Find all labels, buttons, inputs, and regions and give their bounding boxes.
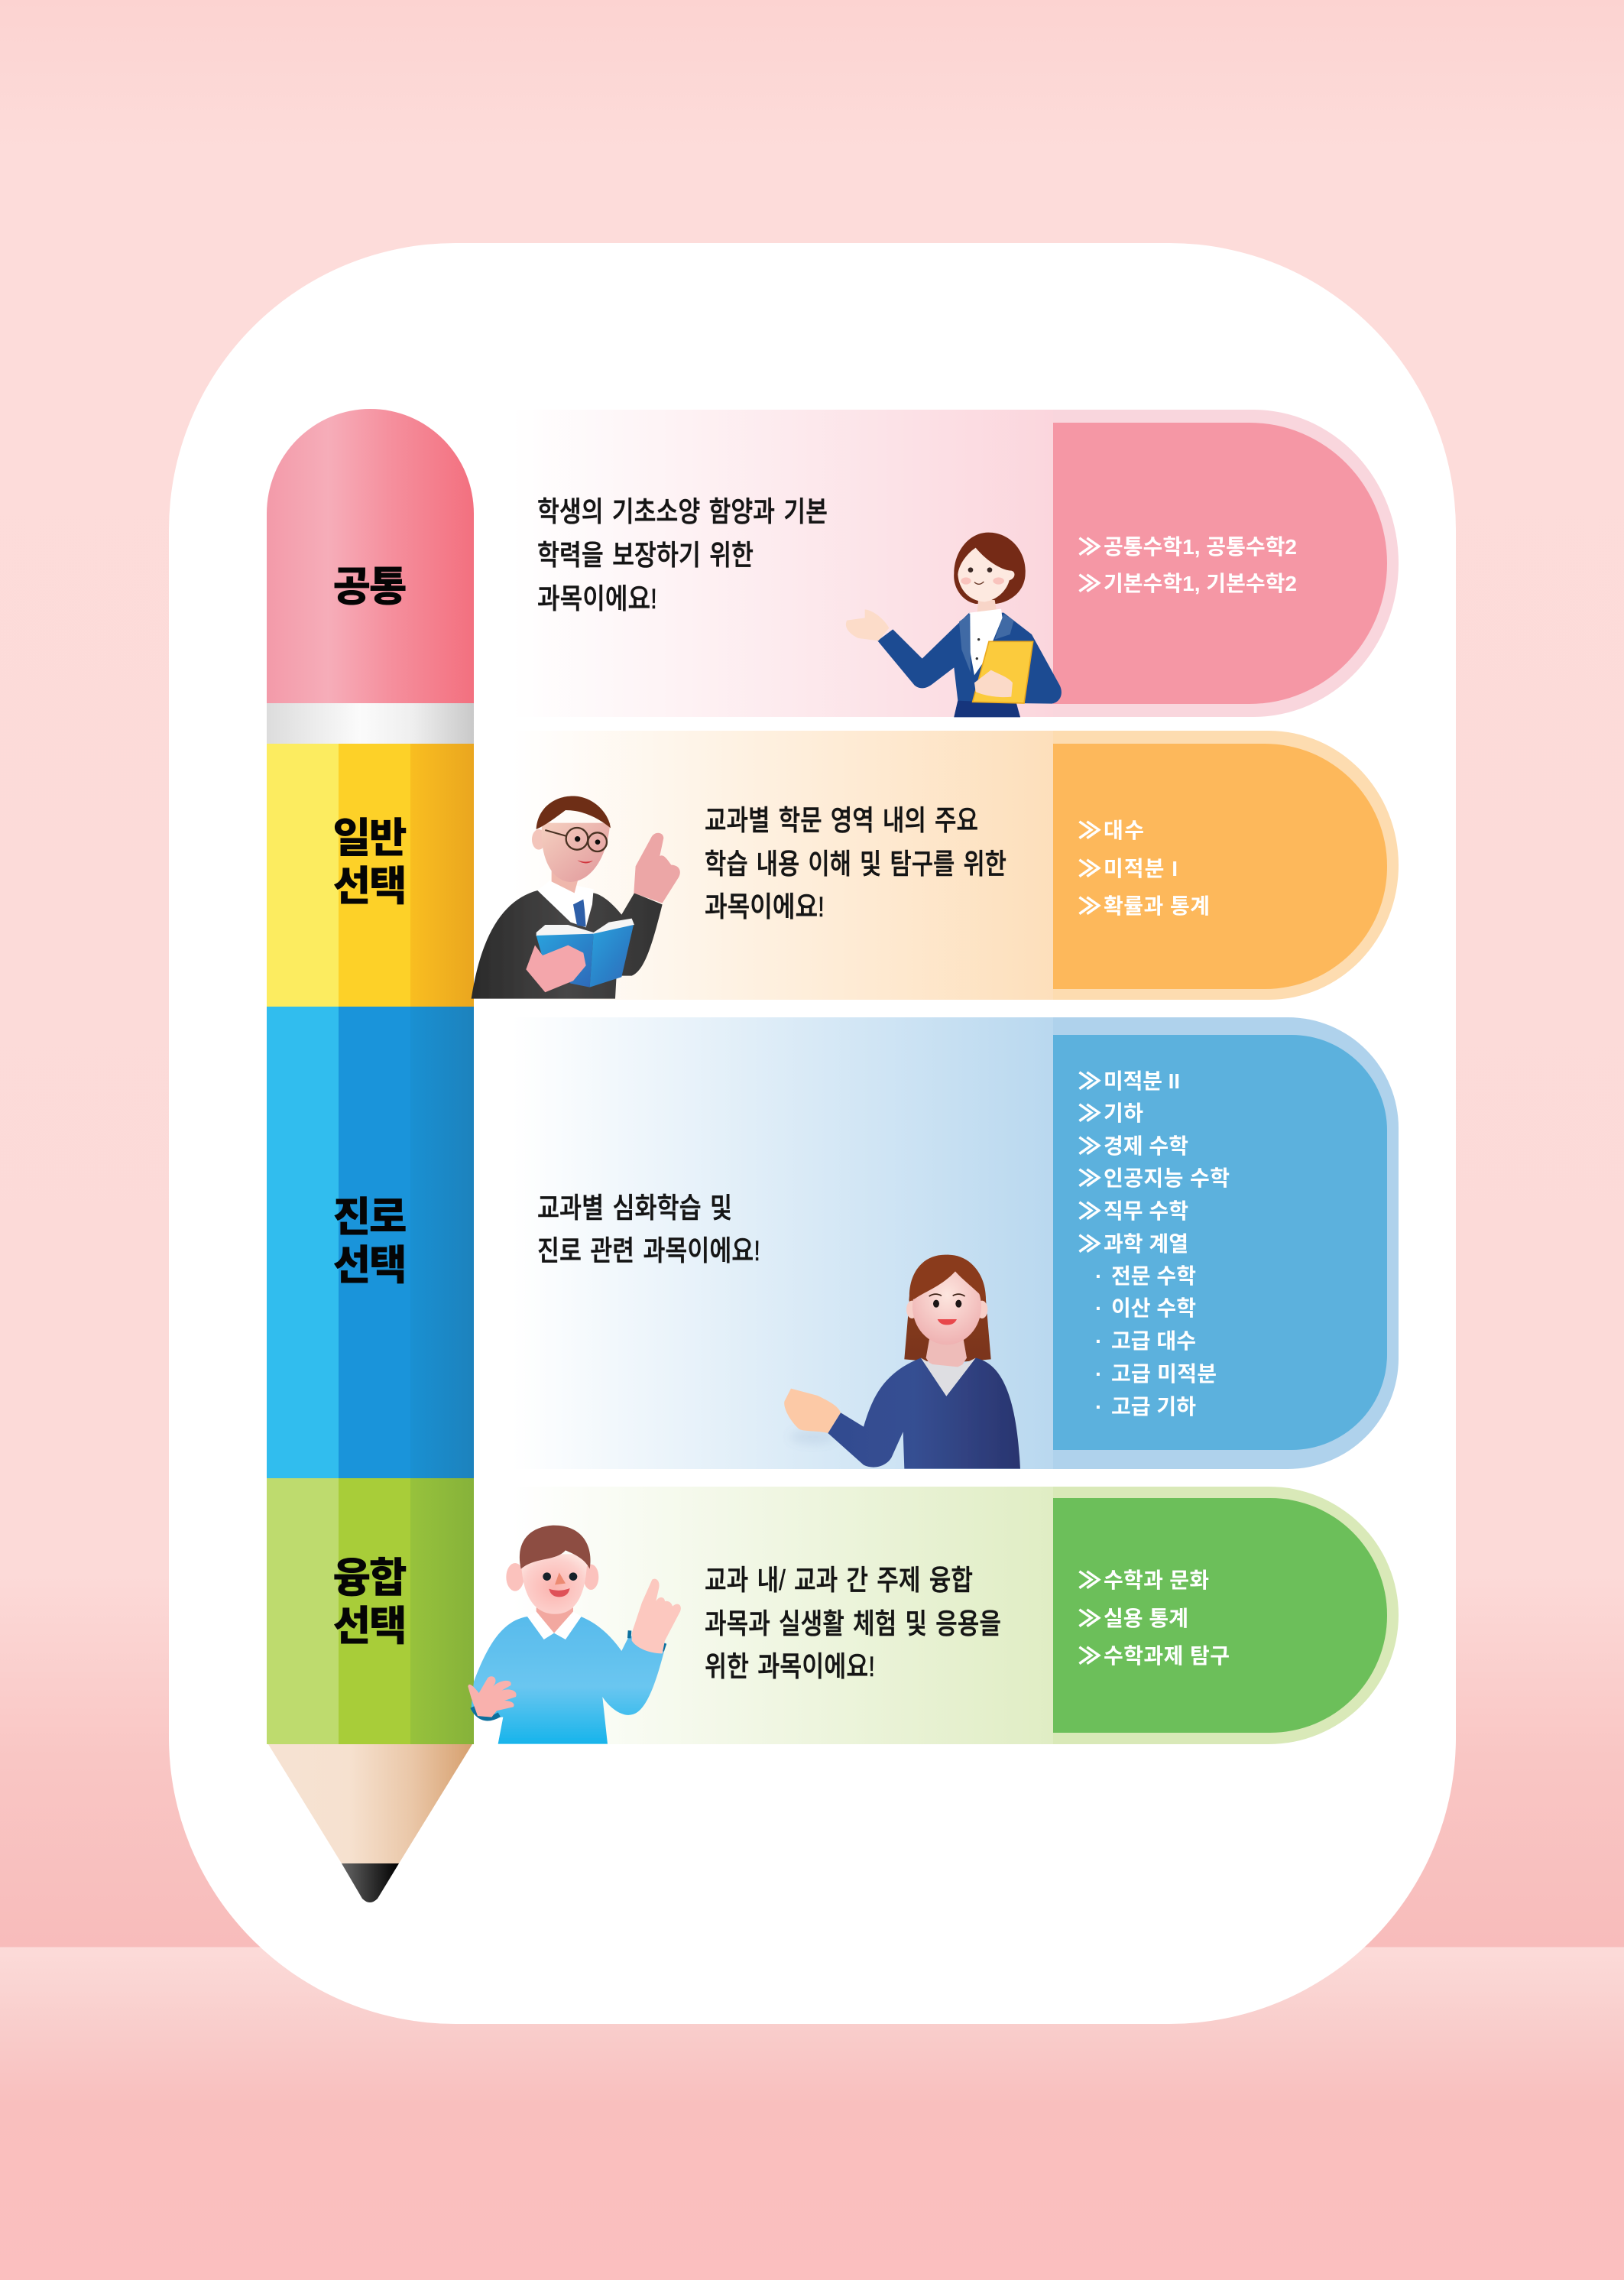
course list: 전문 수학	[1111, 1264, 1196, 1288]
description text	[705, 805, 1006, 923]
pencil label: 진로 선택: 선택	[333, 1243, 407, 1289]
pencil label: 융합 선택	[333, 1555, 407, 1649]
description text: 과목이에요!	[537, 583, 657, 615]
panel background	[497, 731, 1399, 1000]
course list: ≫	[1078, 572, 1101, 597]
course box	[1053, 1035, 1387, 1450]
course list: 고급 대수	[1111, 1329, 1196, 1353]
course list: ≫	[1078, 1607, 1101, 1632]
panel: 공통	[497, 410, 1399, 717]
character: boy in light blue sweater	[468, 1526, 681, 1744]
pencil label: 일반 선택: 선택	[333, 864, 407, 910]
course list: 대수	[1104, 819, 1144, 842]
course list: 고급 기하	[1111, 1395, 1196, 1419]
description text: 위한 과목이에요!	[705, 1651, 875, 1682]
description text: 학습 내용 이해 및 탐구를 위한	[705, 848, 1006, 880]
course list: 직무 수학	[1104, 1199, 1188, 1223]
course list: ·	[1095, 1329, 1102, 1353]
course list: ·	[1095, 1264, 1102, 1288]
course list	[1078, 1568, 1230, 1669]
description text	[537, 496, 828, 615]
course list: 경제 수학	[1104, 1134, 1188, 1158]
pencil label: 융합 선택: 선택	[333, 1604, 407, 1649]
description text	[705, 1565, 1001, 1682]
pencil blue section	[267, 1007, 474, 1478]
pencil	[267, 409, 474, 1902]
description text: 진로 관련 과목이에요!	[537, 1235, 760, 1266]
description text: 교과별 심화학습 및	[537, 1192, 732, 1224]
course list: 인공지능 수학	[1104, 1166, 1230, 1190]
course list: ≫	[1078, 1644, 1101, 1669]
course list	[1078, 1069, 1230, 1419]
panel: 융합 선택	[468, 1487, 1399, 1744]
course list: ≫	[1078, 1069, 1101, 1095]
course list: ·	[1095, 1296, 1102, 1320]
description text: 교과 내/ 교과 간 주제 융합	[705, 1565, 973, 1596]
course list: 이산 수학	[1111, 1296, 1196, 1320]
pencil label: 융합 선택: 융합	[333, 1555, 407, 1601]
course list: ≫	[1078, 894, 1101, 919]
course list: 실용 통계	[1104, 1607, 1188, 1630]
pencil ferrule	[267, 703, 474, 744]
course list: ≫	[1078, 1134, 1101, 1159]
course list: 기하	[1104, 1101, 1143, 1125]
panel background	[497, 410, 1399, 717]
pencil label: 일반 선택	[333, 816, 407, 910]
description text: 교과별 학문 영역 내의 주요	[705, 805, 978, 836]
pencil label: 일반 선택: 일반	[333, 816, 407, 861]
course list: ·	[1095, 1395, 1102, 1419]
course list	[1078, 819, 1210, 919]
course list: ≫	[1078, 857, 1101, 882]
white rounded card	[169, 243, 1456, 2024]
course list: 미적분 II	[1104, 1069, 1180, 1093]
description text: 과목이에요!	[705, 891, 825, 923]
character: man with glasses and blue book	[472, 796, 680, 999]
pencil label: 진로 선택: 진로	[333, 1195, 407, 1241]
course list: ≫	[1078, 1166, 1101, 1192]
pencil green section	[267, 1478, 474, 1744]
description text: 학생의 기초소양 함양과 기본	[537, 496, 828, 527]
character: woman in navy sweater	[784, 1255, 1020, 1469]
course list: ≫	[1078, 1199, 1101, 1224]
pencil yellow section	[267, 744, 474, 1007]
course list: ≫	[1078, 535, 1101, 560]
course list: ≫	[1078, 1101, 1101, 1127]
description text	[537, 1192, 760, 1266]
character: woman with yellow folder	[846, 533, 1062, 717]
course list: 수학과제 탐구	[1104, 1644, 1230, 1668]
pencil label: 공통: 공통	[333, 564, 407, 610]
panel: 일반 선택	[472, 731, 1399, 1000]
panel background	[497, 1017, 1399, 1469]
pencil lead	[342, 1863, 399, 1902]
panel: 진로 선택	[497, 1017, 1399, 1469]
course list: 과학 계열	[1104, 1232, 1188, 1256]
course list: ·	[1095, 1362, 1102, 1386]
course list: ≫	[1078, 819, 1101, 844]
course list: ≫	[1078, 1232, 1101, 1257]
course list	[1078, 535, 1297, 597]
course list: ≫	[1078, 1568, 1101, 1594]
description text: 학력을 보장하기 위한	[537, 540, 754, 571]
description text: 과목과 실생활 체험 및 응용을	[705, 1608, 1001, 1639]
course box	[1053, 1498, 1387, 1733]
course list: 확률과 통계	[1104, 894, 1210, 918]
pencil eraser	[267, 409, 474, 703]
panel background	[497, 1487, 1399, 1744]
course list: 고급 미적분	[1111, 1362, 1217, 1386]
course list: 기본수학1, 기본수학2	[1104, 572, 1297, 595]
course box	[1053, 744, 1387, 989]
course list: 미적분 I	[1104, 857, 1178, 881]
course box	[1053, 423, 1387, 704]
pencil label: 진로 선택	[333, 1195, 407, 1289]
course list: 수학과 문화	[1104, 1568, 1209, 1592]
pencil wood tip	[268, 1744, 472, 1863]
course list: 공통수학1, 공통수학2	[1104, 535, 1297, 559]
